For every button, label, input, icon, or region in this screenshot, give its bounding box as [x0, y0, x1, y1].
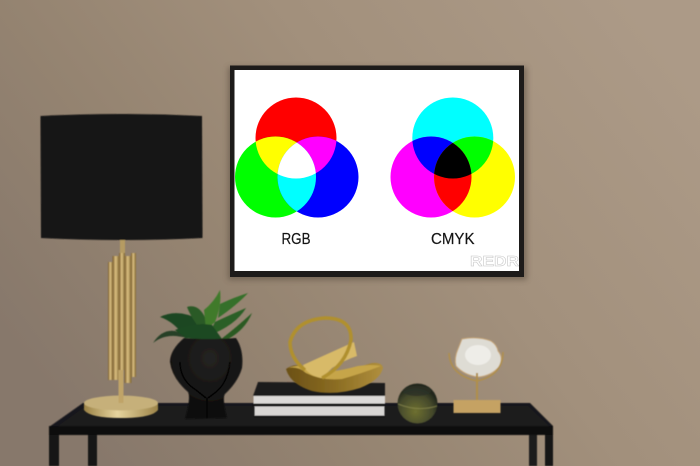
lamp shade [40, 114, 202, 240]
table [49, 403, 553, 466]
agate stone [455, 338, 501, 377]
stand arc [449, 352, 503, 381]
RGB label: RGB [282, 231, 310, 248]
watermark: REDR [470, 253, 519, 270]
plant leaves [153, 290, 252, 343]
stacked books [253, 382, 385, 417]
lamp base [84, 385, 158, 418]
CMYK label: CMYK [431, 231, 475, 248]
framed poster [228, 66, 527, 280]
glass sphere [398, 384, 438, 424]
bowl [286, 363, 383, 393]
gold ring sculpture [286, 318, 383, 393]
potted plant [153, 290, 252, 419]
table lamp [40, 114, 202, 418]
RGB diagram [235, 98, 358, 218]
agate on stand [449, 338, 503, 413]
stand base [454, 400, 500, 413]
lamp neck and tubes [108, 240, 136, 405]
plant pot [170, 338, 242, 419]
twisted ribbon [303, 342, 357, 378]
ring [290, 318, 351, 378]
CMYK diagram [390, 98, 515, 218]
